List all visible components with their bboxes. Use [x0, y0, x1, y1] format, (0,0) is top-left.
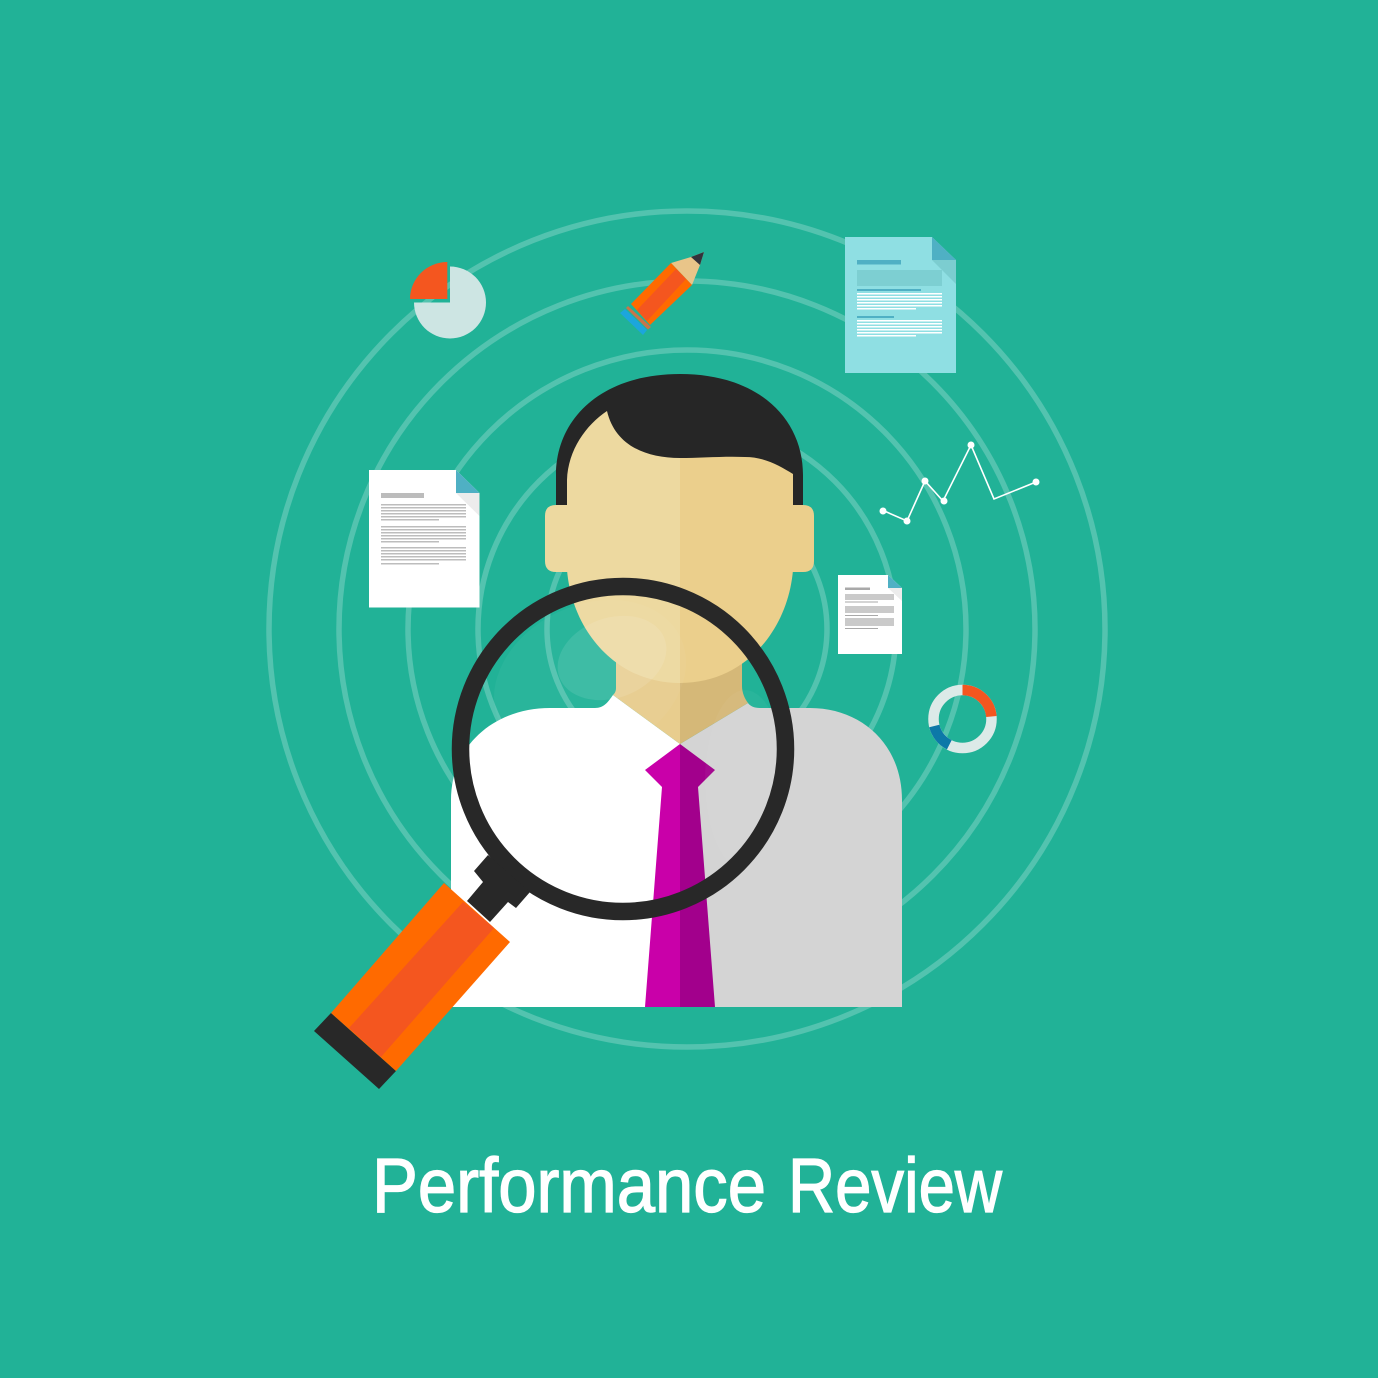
neck — [613, 660, 748, 744]
person figure — [451, 374, 902, 1007]
icon: line chart — [880, 442, 1040, 524]
title: Performance — [372, 1143, 766, 1229]
handle stripe — [349, 902, 494, 1057]
concentric rings — [269, 211, 1105, 1047]
handle connector — [467, 855, 530, 922]
handle grip — [331, 883, 510, 1071]
lens ring — [460, 586, 786, 912]
shirt: shaded side — [680, 703, 902, 1007]
handle end cap — [314, 1013, 396, 1089]
hair — [556, 374, 803, 505]
ears — [545, 505, 814, 572]
face — [563, 395, 797, 683]
magnifying glass — [314, 570, 786, 1089]
shirt: lit side — [451, 695, 680, 1007]
icon: white document left — [369, 470, 480, 608]
infographic canvas — [266, 208, 1108, 1214]
lens glare — [558, 616, 714, 780]
necktie — [645, 744, 715, 1007]
icon: blue document — [845, 237, 956, 373]
title: Review — [788, 1143, 1002, 1229]
icon: pencil — [620, 252, 704, 335]
icon: donut chart — [934, 690, 992, 748]
icon: small document right — [838, 575, 902, 654]
icon: pie chart — [410, 262, 486, 338]
